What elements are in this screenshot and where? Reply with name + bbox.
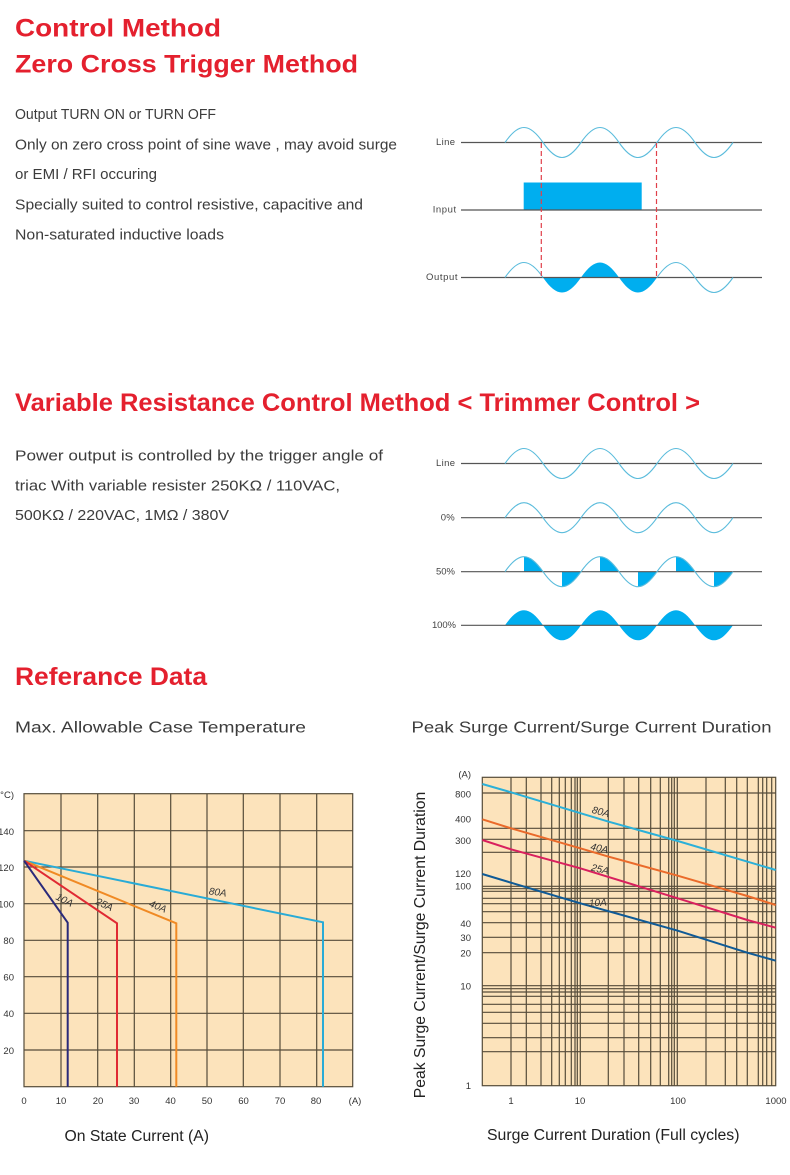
x axis labels: 50 bbox=[202, 1096, 212, 1107]
x axis labels: 20 bbox=[93, 1096, 103, 1107]
text block: zero cross description: Specially suited to control resistive, capacitive and bbox=[15, 196, 363, 214]
x axis labels: 60 bbox=[238, 1096, 249, 1107]
heading: reference data: Referance Data bbox=[15, 663, 208, 691]
text block: zero cross description: Only on zero cross point of sine wave , may avoid surge bbox=[15, 136, 397, 153]
y axis labels: 400 bbox=[455, 815, 471, 826]
text block: trimmer description bbox=[15, 448, 384, 524]
text block: zero cross description: Non-saturated inductive loads bbox=[15, 226, 224, 244]
y axis labels: 800 bbox=[455, 790, 471, 801]
plot background bbox=[482, 777, 776, 1086]
chart title: case temperature: Max. Allowable Case Temperature bbox=[15, 720, 306, 737]
y axis labels: (A) bbox=[458, 770, 471, 780]
y axis labels: 100 bbox=[455, 882, 471, 893]
0% waveform bbox=[441, 503, 762, 533]
text block: zero cross description: or EMI / RFI occuring bbox=[15, 166, 157, 183]
y axis labels: 40 bbox=[3, 1009, 14, 1020]
curve labels: 40A bbox=[589, 842, 609, 856]
curve: 40A bbox=[482, 819, 776, 905]
dashed trigger markers bbox=[541, 143, 656, 277]
x axis title: On State Current (A) bbox=[64, 1128, 209, 1145]
curve: 80A bbox=[482, 784, 776, 870]
curve: 25A bbox=[482, 840, 776, 928]
heading: zero cross trigger method: Zero Cross Trigger Method bbox=[15, 50, 358, 78]
50% waveform: 50% bbox=[436, 566, 456, 577]
y axis labels: 20 bbox=[3, 1046, 14, 1057]
curve labels: 25A bbox=[589, 862, 610, 877]
x axis labels: 10 bbox=[56, 1096, 66, 1107]
y axis labels bbox=[455, 770, 471, 1092]
heading: control method: Control Method bbox=[15, 15, 221, 43]
x axis labels bbox=[508, 1096, 787, 1107]
line waveform bbox=[436, 448, 762, 478]
x axis labels bbox=[21, 1096, 361, 1107]
y axis labels: 80 bbox=[3, 936, 14, 947]
x axis labels: (A) bbox=[349, 1096, 361, 1107]
y axis labels: 120 bbox=[455, 869, 471, 880]
curve labels: 80A bbox=[591, 805, 611, 820]
x axis title: Surge Current Duration (Full cycles) bbox=[487, 1127, 740, 1144]
x axis labels: 70 bbox=[275, 1096, 285, 1107]
curve labels bbox=[589, 805, 611, 909]
line waveform bbox=[436, 128, 762, 158]
y axis labels: 30 bbox=[460, 933, 471, 944]
input pulse bbox=[433, 182, 762, 215]
text block: trimmer description: 500KΩ / 220VAC, 1MΩ / 380V bbox=[15, 507, 229, 524]
curve: 25A bbox=[24, 861, 117, 1087]
chart: zero cross waveforms bbox=[426, 128, 762, 292]
input pulse: Input bbox=[433, 204, 457, 215]
y axis labels: 10 bbox=[460, 982, 471, 992]
section: zero cross trigger method bbox=[15, 15, 762, 292]
curve: 10A bbox=[24, 861, 68, 1087]
y axis labels: °C) bbox=[0, 790, 14, 801]
x axis labels: 0 bbox=[21, 1096, 27, 1107]
x axis labels: 1000 bbox=[765, 1096, 787, 1107]
100% waveform bbox=[432, 610, 762, 640]
x axis labels: 80 bbox=[311, 1096, 321, 1107]
curve labels bbox=[54, 886, 228, 916]
x axis labels: 100 bbox=[670, 1096, 686, 1107]
50% waveform bbox=[436, 557, 762, 587]
y axis labels: 60 bbox=[3, 972, 14, 984]
text block: zero cross description: Output TURN ON or TURN OFF bbox=[15, 106, 216, 123]
curve labels: 10A bbox=[589, 898, 607, 909]
curve: 10A bbox=[482, 874, 776, 961]
100% waveform: 100% bbox=[432, 620, 457, 631]
output waveform: Output bbox=[426, 272, 458, 283]
chart: trigger angle waveforms bbox=[432, 448, 762, 640]
text block: zero cross description bbox=[15, 106, 397, 244]
y axis labels: 40 bbox=[460, 919, 471, 930]
line waveform: Line bbox=[436, 137, 455, 148]
x axis labels: 40 bbox=[165, 1096, 176, 1107]
y axis labels: 20 bbox=[460, 948, 471, 960]
x axis labels: 10 bbox=[575, 1096, 585, 1107]
chart: peak surge current vs duration bbox=[412, 770, 787, 1144]
x axis labels: 30 bbox=[129, 1096, 139, 1107]
curve labels: 80A bbox=[208, 886, 228, 900]
output waveform bbox=[426, 262, 762, 292]
y axis labels: 1 bbox=[466, 1081, 471, 1092]
plot background bbox=[24, 794, 353, 1087]
line waveform: Line bbox=[436, 458, 455, 469]
curve labels: 10A bbox=[54, 892, 75, 910]
y axis labels: 300 bbox=[455, 836, 471, 847]
heading: variable resistance control method: Variable Resistance Control Method < Trimmer Control > bbox=[15, 389, 700, 417]
curve labels: 25A bbox=[93, 896, 115, 914]
x axis labels: 1 bbox=[508, 1096, 514, 1107]
0% waveform: 0% bbox=[441, 512, 455, 523]
chart: case temperature vs on state current bbox=[0, 790, 361, 1145]
curve: 40A bbox=[24, 861, 176, 1087]
curve: 80A bbox=[24, 861, 323, 1087]
section: variable resistance control bbox=[15, 389, 762, 640]
text block: trimmer description: Power output is controlled by the trigger angle of bbox=[15, 448, 384, 465]
y axis labels bbox=[0, 790, 14, 1057]
chart title: peak surge current: Peak Surge Current/Surge Current Duration bbox=[412, 720, 772, 737]
y axis title: Peak Surge Current/Surge Current Duration bbox=[412, 792, 429, 1098]
text block: trimmer description: triac With variable resister 250KΩ / 110VAC, bbox=[15, 478, 340, 495]
curve labels: 40A bbox=[147, 899, 168, 916]
